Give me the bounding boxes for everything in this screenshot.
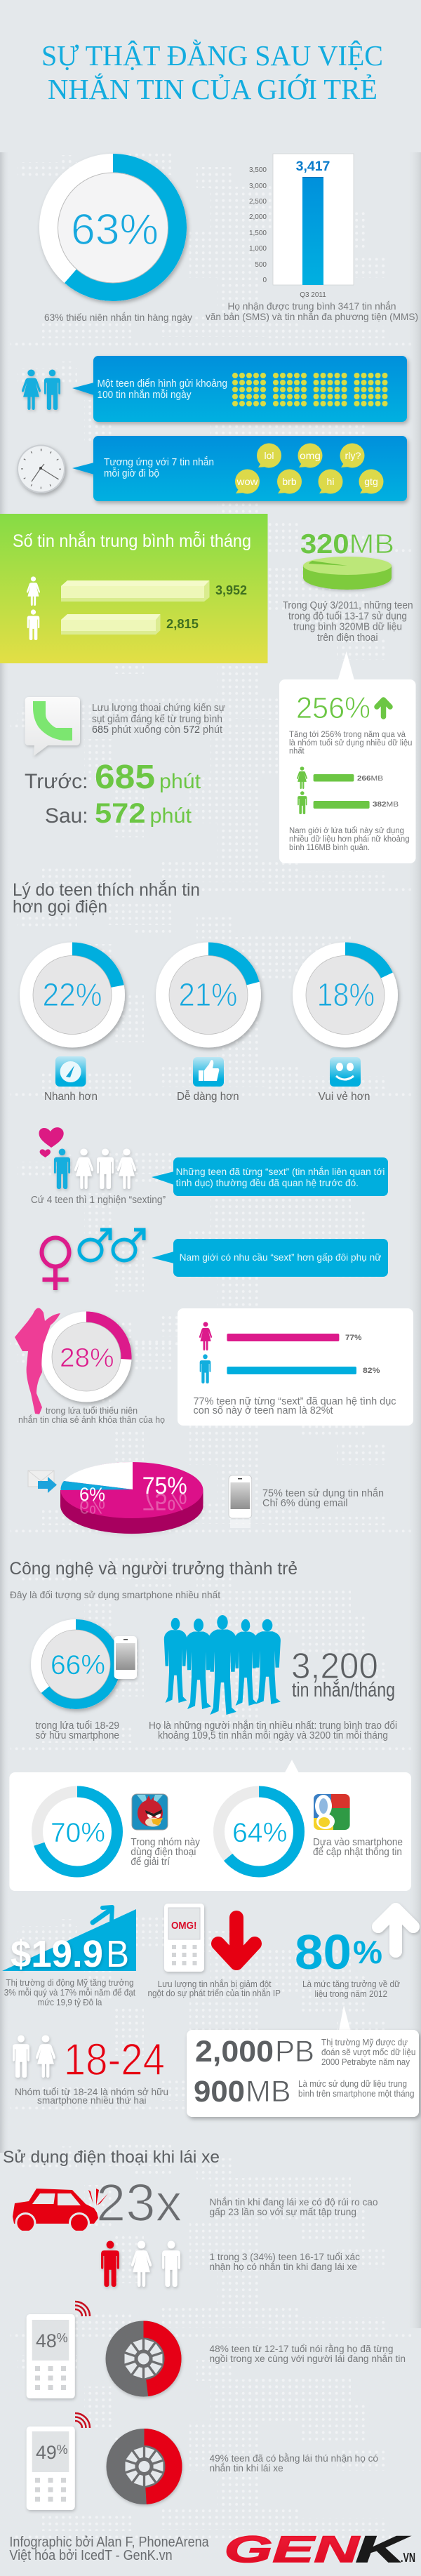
panel: 256% data growth	[279, 651, 415, 863]
caption: 49%: 49% teen đã có bằng lái thú nhận họ có	[209, 2453, 378, 2464]
bar: boys 2,815	[27, 609, 199, 640]
donut: 22% faster	[20, 942, 125, 1047]
caption: 48%: 48% teen từ 12-17 tuổi nói rằng họ đã từng	[209, 2344, 393, 2354]
bar chart: 3,417 messages: 0	[262, 277, 267, 284]
logo: GenK	[225, 2529, 415, 2570]
panel: 2,000PB and 900MB: MB	[246, 2075, 290, 2109]
text: voice traffic drop: Lưu lượng thoại chứng kiến sự	[92, 702, 225, 714]
donut: 70%: 70%	[51, 1818, 105, 1848]
title: SỰ THẬT ĐẰNG SAU VIỆC	[41, 39, 383, 72]
chat bubbles: gtg	[364, 476, 378, 487]
caption: 48%: ngồi trong xe cùng với người lái đang nhắn tin	[209, 2353, 406, 2364]
icon: 1 of 3 teens	[101, 2241, 180, 2287]
panel: 77% and 82%: 82%	[363, 1367, 380, 1375]
stat: after 572 minutes: 572	[95, 798, 146, 829]
caption: 3417 messages: Họ nhận được trung bình 3417 tin nhắn	[227, 300, 396, 312]
bar: boys 2,815: 2,815	[166, 617, 199, 631]
labels: reasons: Nhanh hơn	[44, 1091, 98, 1103]
icon: group silhouette	[164, 1615, 281, 1715]
panel: 100 messages a day: 100 tin nhắn mỗi ngày	[97, 389, 192, 401]
panel: 7 messages per walking hour	[72, 436, 407, 501]
caption: 1 in 3: 1 trong 3 (34%) teen 16-17 tuổi xác	[209, 2252, 360, 2262]
panel: 77% and 82%: con số này ở teen nam là 82%t	[194, 1405, 333, 1416]
caption: 18-29 smartphone	[35, 1720, 119, 1741]
bar chart: 3,417 messages: 500	[255, 261, 267, 269]
donut: 70%	[37, 1791, 117, 1871]
labels: reasons: Vui vẻ hơn	[319, 1091, 370, 1103]
stat: 3,200 messages per month: 3,200	[291, 1646, 378, 1687]
stat: 18-24: 18-24	[64, 2034, 165, 2085]
callout: sexting teens: Những teen đã từng “sext” (tin nhắn liên quan tới	[176, 1167, 385, 1177]
caption: 1 in 4: Cứ 4 teen thì 1 nghiện “sexting”	[31, 1195, 166, 1206]
panel: 2,000PB and 900MB: bình trên smartphone một tháng	[298, 2089, 415, 2099]
stat: before 685 minutes: Trước:	[25, 770, 88, 793]
panel: 77% and 82%: 77%	[345, 1334, 362, 1342]
logo: GenK: GEN	[225, 2529, 361, 2570]
panel: 2,000PB and 900MB	[187, 2005, 419, 2117]
caption: 80%: Là mức tăng trưởng về dữ	[302, 1979, 400, 1989]
donut: 28%: 28%	[60, 1343, 114, 1373]
callout: males twice as likely: Nam giới có nhu cầu “sext” hơn gấp đôi phụ nữ	[180, 1252, 381, 1263]
icon: gender symbols	[42, 1230, 144, 1290]
stat: 23x: 23x	[96, 2173, 182, 2232]
bar chart: 3,417 messages: 2,500	[249, 198, 267, 206]
wheel chart: 49%	[107, 2429, 182, 2504]
caption: 75% vs 6%	[262, 1487, 384, 1509]
donut: 21% easier: 21%	[178, 976, 237, 1013]
title: NHẮN TIN CỦA GIỚI TRẺ	[48, 73, 377, 105]
icon: phone speech bubble	[25, 697, 80, 756]
donut: 63%	[39, 154, 187, 301]
icon: phone 48%: 48	[36, 2330, 57, 2351]
caption: mobile market: 3% mỗi quý và 17% mỗi năm để đạt	[4, 1987, 135, 1998]
icon: woman silhouette	[15, 1308, 60, 1414]
stat: 320MB: 320	[300, 529, 349, 559]
icon: teen couple	[22, 369, 60, 410]
caption: 75% vs 6%: Chỉ 6% dùng email	[262, 1498, 348, 1509]
chat bubbles	[235, 444, 383, 494]
labels: reasons	[44, 1089, 370, 1103]
bar: girls 3,952: 3,952	[215, 583, 247, 597]
panel: entertainment and information: để giải trí	[131, 1857, 170, 1868]
caption: mobile market: Thị trường di động Mỹ tăng trưởng	[6, 1978, 134, 1988]
caption: 48%	[209, 2344, 406, 2364]
donut: 21% easier	[156, 942, 261, 1047]
logo: GenK: K	[356, 2529, 410, 2570]
chat bubbles: wow	[236, 476, 258, 487]
panel: 77% and 82%	[178, 1308, 413, 1426]
bar chart: 3,417 messages: 3,000	[249, 182, 267, 190]
caption: 320MB	[283, 599, 413, 644]
panel: 2,000PB and 900MB: 2,000	[195, 2035, 274, 2069]
panel: entertainment and information: dùng điện thoại	[131, 1847, 196, 1858]
bar chart: 3,417 messages: 1,500	[249, 230, 267, 237]
donut: 18% more fun	[293, 942, 398, 1047]
icon: smiley	[330, 1057, 361, 1087]
donut: 22% faster: 22%	[42, 976, 102, 1013]
bar chart: 3,417 messages: Q3 2011	[300, 291, 326, 299]
panel: 2,000PB and 900MB: 900	[194, 2075, 245, 2109]
stat: 3,200 messages per month	[291, 1646, 395, 1701]
stat: 80%	[295, 1925, 382, 1979]
panel: 100 messages a day: Một teen điển hình gửi khoảng	[97, 378, 227, 390]
heading: technology and young adults: Công nghệ và người trưởng thành trẻ	[9, 1559, 298, 1579]
caption: 63%: 63% thiếu niên nhắn tin hàng ngày	[44, 312, 192, 323]
panel: entertainment and information: để cập nhật thông tin	[313, 1847, 402, 1858]
icon: up arrow	[377, 700, 390, 717]
bar chart: 3,417 messages: 2,000	[249, 213, 267, 221]
chart: $19.9B market: B	[106, 1933, 129, 1975]
panel: 2,000PB and 900MB: đoán sẽ vượt mốc dữ liệu	[321, 2047, 415, 2057]
title	[41, 39, 383, 105]
icon: OMG phone: OMG!	[171, 1920, 196, 1932]
caption: 3417 messages	[206, 300, 418, 322]
callout: sexting teens	[152, 1157, 388, 1196]
chat bubbles: omg	[300, 450, 321, 461]
icon: OMG phone	[164, 1904, 204, 1972]
caption: 23x: gấp 23 lần so với sự mất tập trung	[209, 2207, 356, 2217]
donut: 64%: 64%	[232, 1818, 288, 1848]
text: voice traffic drop: 685 phút xuống còn 572 phút	[92, 724, 223, 736]
caption: 49%	[209, 2453, 378, 2474]
caption: 75% vs 6%: 75% teen sử dụng tin nhắn	[262, 1487, 384, 1499]
callout: sexting teens: tình dục) thường đều đã quan hệ trước đó.	[176, 1178, 359, 1188]
arrow: up white	[378, 1909, 413, 1951]
panel: 256% data growth: bình 116MB bình quân.	[289, 844, 370, 852]
icon: clock	[17, 445, 65, 493]
subheading: heaviest smartphone users: Đây là đối tượng sử dụng smartphone nhiều nhất	[10, 1589, 220, 1600]
stat: 80%: %	[353, 1934, 382, 1970]
panel: 256% data growth: Nam giới ở lứa tuổi này sử dụng	[289, 827, 404, 835]
donut: 66%	[31, 1619, 121, 1709]
stat: 3,200 messages per month: tin nhắn/tháng	[292, 1678, 395, 1701]
heading: why teens prefer texting	[13, 879, 200, 917]
caption: 3417 messages: văn bản (SMS) và tin nhắn đa phương tiện (MMS)	[206, 311, 418, 322]
footer credits: Infographic bởi Alan F, PhoneArena	[9, 2535, 209, 2550]
caption: 49%: nhắn tin khi lái xe	[209, 2463, 283, 2474]
yellow message dots	[232, 372, 389, 407]
panel: 77% and 82%: 77% teen nữ từng “sext” đã quan hệ tình dục	[194, 1396, 396, 1407]
caption: heaviest texters: Họ là những người nhắn tin nhiều nhất: trung bình trao đổi	[149, 1720, 397, 1732]
icon: envelope with arrow	[28, 1470, 57, 1493]
chart: $19.9B market: $19.9	[11, 1933, 103, 1975]
caption: 28%: nhắn tin chia sẻ ảnh khỏa thân của họ	[18, 1414, 165, 1425]
panel: 256% data growth: nhiều dữ liệu hơn phái nữ khoảng	[289, 835, 410, 844]
panel: 256% data growth: là nhóm tuổi sử dụng nhiều dữ liệu	[289, 739, 413, 748]
panel: 2,000PB and 900MB: Là mức sử dụng dữ liệu trung	[298, 2079, 407, 2089]
pie: 320MB	[303, 557, 392, 590]
heading: using phones while driving: Sử dụng điện thoại khi lái xe	[3, 2148, 220, 2167]
footer credits: Việt hóa bởi IcedT - GenK.vn	[9, 2548, 173, 2563]
donut: 63%: 63%	[71, 206, 159, 254]
caption: 18-29 smartphone: sở hữu smartphone	[35, 1730, 119, 1741]
panel: 7 messages per walking hour: Tương ứng với 7 tin nhắn	[104, 456, 214, 468]
panel: 2,000PB and 900MB: 2000 Petrabyte năm nay	[321, 2057, 410, 2067]
caption: 320MB: trung bình 320MB dữ liệu	[293, 621, 402, 633]
caption: 1 in 3	[209, 2252, 360, 2272]
chat bubbles: lol	[264, 450, 274, 461]
caption: traffic drop: Lưu lượng tin nhắn bị giảm đột	[158, 1979, 272, 1989]
caption: 23x	[209, 2197, 377, 2217]
caption: 1 in 3: nhận họ có nhắn tin khi đang lái xe	[209, 2262, 357, 2272]
panel: 256% data growth: nhất	[289, 747, 305, 755]
chat bubbles: brb	[282, 476, 297, 487]
donut: 66%: 66%	[51, 1650, 105, 1680]
caption: heaviest texters	[149, 1720, 397, 1741]
bar chart: 3,417 messages: 3,500	[249, 166, 267, 174]
caption: 28%	[18, 1406, 165, 1425]
bars by gender: 266MB	[357, 774, 383, 783]
arrow: down red	[218, 1918, 255, 1963]
caption: 18-29 smartphone: trong lứa tuổi 18-29	[35, 1720, 119, 1732]
donut: 18% more fun: 18%	[317, 976, 375, 1013]
stat: after 572 minutes: Sau:	[45, 804, 88, 828]
chart: $19.9B market	[2, 1907, 136, 1975]
callout: males twice as likely	[152, 1239, 388, 1277]
caption: 80%	[302, 1979, 400, 1999]
caption: mobile market	[4, 1978, 135, 2007]
stat: before 685 minutes: phút	[159, 770, 201, 793]
panel: average messages per month: Số tin nhắn trung bình mỗi tháng	[13, 531, 251, 551]
caption: 23x: Nhắn tin khi đang lái xe có độ rủi ro cao	[209, 2197, 377, 2207]
stat: 320MB	[300, 529, 394, 559]
caption: traffic drop	[147, 1979, 281, 1998]
3D pie: 75% vs 6%: 6%	[79, 1496, 105, 1518]
chat bubbles: hi	[327, 476, 334, 487]
text: voice traffic drop: sụt giảm đáng kể từ trung bình	[92, 713, 222, 725]
icon: phone 49%: %	[57, 2443, 68, 2457]
icon: phone 49%: 49	[36, 2442, 57, 2463]
bars by gender: 382MB	[373, 800, 399, 809]
donut: 28%	[41, 1311, 132, 1402]
panel: entertainment and information: Trong nhóm này	[131, 1837, 201, 1848]
icon: Google	[314, 1794, 350, 1831]
caption: 320MB: trong độ tuổi 13-17 sử dụng	[288, 610, 407, 622]
panel: 256% data growth: 256%	[296, 691, 370, 725]
panel: average messages per month	[0, 514, 268, 663]
icon: smartphone	[229, 1475, 252, 1528]
icon: angry bird	[132, 1794, 168, 1830]
icon: thumbs up	[193, 1057, 224, 1087]
bar chart: 3,417 messages: 1,000	[249, 245, 267, 253]
caption: mobile market: mức 19,9 tỷ Đô la	[38, 1998, 102, 2007]
icon: phone 49%	[27, 2413, 90, 2510]
icon: phone 48%: %	[57, 2331, 68, 2345]
caption: 80%: liệu trong năm 2012	[314, 1989, 387, 1999]
chat bubbles: rly?	[345, 450, 361, 461]
panel: 100 messages a day	[72, 356, 407, 422]
icon: phone 48%	[27, 2302, 90, 2398]
bar: girls 3,952	[27, 576, 247, 606]
caption: 320MB: trên điện thoại	[317, 632, 377, 644]
3D pie: 75% vs 6%: 6%	[79, 1484, 105, 1505]
icon: crashed car	[13, 2189, 108, 2233]
bars by gender	[297, 766, 399, 814]
panel: 2,000PB and 900MB: Thị trường Mỹ được dự	[321, 2038, 408, 2047]
stat: after 572 minutes: phút	[150, 804, 192, 828]
heading: why teens prefer texting: Lý do teen thích nhắn tin	[13, 879, 200, 900]
text: voice traffic drop	[92, 702, 225, 736]
panel: entertainment and information: Dựa vào smartphone	[313, 1837, 403, 1848]
caption: 18-24	[15, 2087, 168, 2106]
panel: 256% data growth: Tăng tới 256% trong năm qua và	[289, 731, 406, 739]
stat: after 572 minutes	[45, 798, 192, 829]
caption: 28%: trong lứa tuổi thiếu niên	[46, 1406, 138, 1416]
heading: why teens prefer texting: hơn gọi điện	[13, 897, 107, 917]
bar chart: 3,417 messages	[249, 154, 354, 299]
stat: before 685 minutes	[25, 759, 201, 796]
caption: traffic drop: ngột do sự phát triển của tin nhắn IP	[147, 1988, 281, 1998]
panel: 7 messages per walking hour: mỗi giờ đi bộ	[104, 467, 159, 479]
3D pie: 75% vs 6%: 75%	[142, 1473, 187, 1499]
labels: reasons: Dễ dàng hơn	[177, 1089, 239, 1103]
footer credits	[9, 2535, 209, 2563]
icon: smartphone	[114, 1636, 137, 1679]
3D pie: 75% vs 6%: 75%	[142, 1488, 187, 1515]
stat: before 685 minutes: 685	[95, 759, 155, 796]
donut: 64%	[219, 1791, 299, 1871]
caption: 18-24: Nhóm tuổi từ 18-24 là nhóm sở hữu	[15, 2087, 168, 2097]
icon: hearts and four teens	[39, 1127, 136, 1189]
icon: speed gauge	[55, 1056, 86, 1087]
3D pie: 75% vs 6%	[60, 1462, 203, 1534]
stat: 80%: 80	[295, 1925, 352, 1979]
bar chart: 3,417 messages: 3,417	[296, 159, 330, 174]
icon: white couple	[13, 2036, 55, 2078]
wheel chart: 48%	[105, 2321, 181, 2396]
caption: 18-24: smartphone nhiều thứ hai	[37, 2095, 147, 2106]
panel: entertainment and information	[9, 1760, 411, 1891]
caption: heaviest texters: khoảng 109,5 tin nhắn mỗi ngày và 3200 tin mỗi tháng	[158, 1729, 388, 1741]
panel: 2,000PB and 900MB: PB	[275, 2035, 314, 2069]
stat: 320MB: MB	[349, 529, 394, 559]
